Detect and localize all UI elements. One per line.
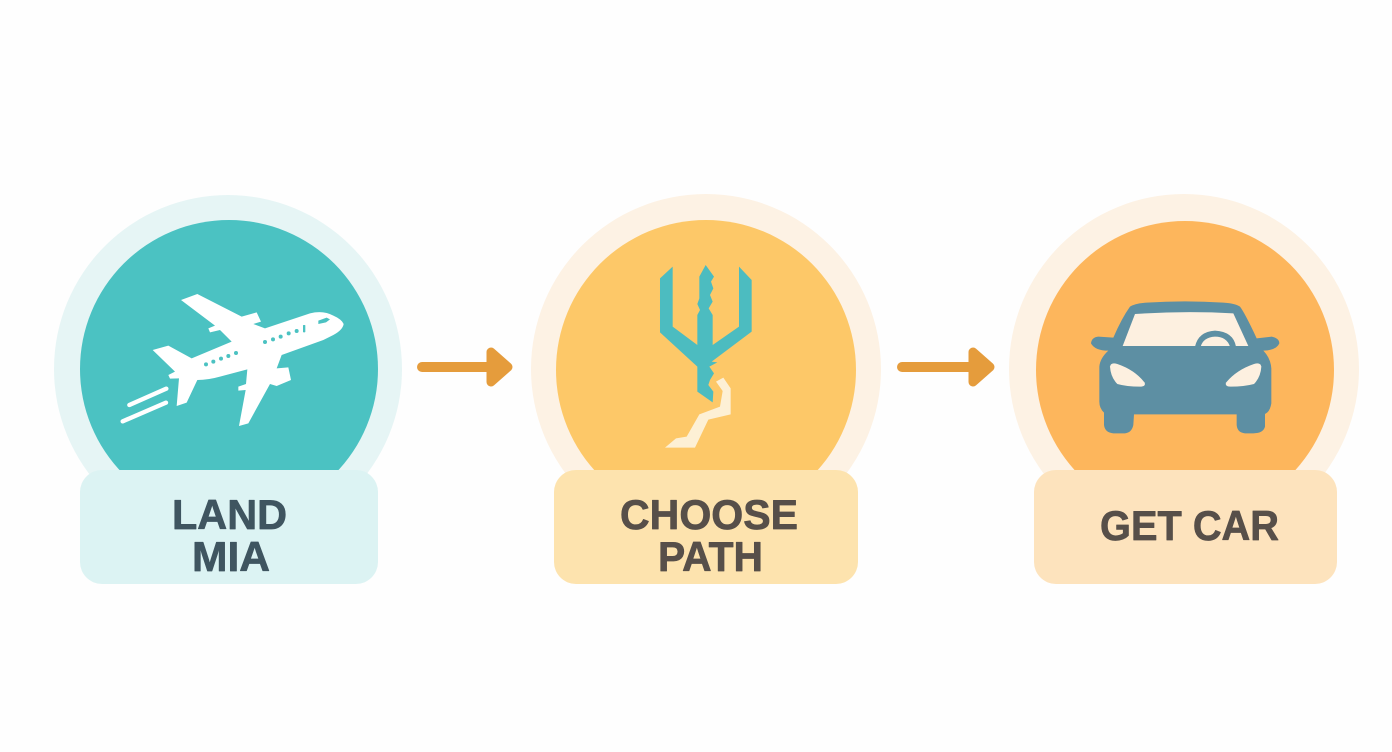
step 1: land at MIA	[54, 195, 402, 584]
icon: forked key	[660, 265, 752, 448]
step 2 circle	[531, 194, 881, 473]
step 2 label: CHOOSE	[620, 491, 798, 538]
step 3 circle	[1009, 194, 1359, 474]
step 1 circle	[54, 195, 402, 474]
arrow: step 1 to step 2	[422, 352, 508, 382]
step 1 label: LAND	[172, 491, 287, 538]
step 2 label	[554, 470, 858, 584]
step 3: get car	[1009, 194, 1359, 584]
step 3 label	[1034, 470, 1337, 584]
arrow: step 2 to step 3	[902, 352, 990, 382]
step 2: choose path	[531, 194, 881, 584]
icon: airplane	[123, 294, 344, 426]
step 1 label	[80, 470, 378, 584]
step 2 label: PATH	[658, 533, 763, 580]
icon: car front view	[1091, 301, 1279, 433]
step 1 label: MIA	[192, 533, 270, 580]
step 3 label: GET CAR	[1100, 502, 1279, 549]
